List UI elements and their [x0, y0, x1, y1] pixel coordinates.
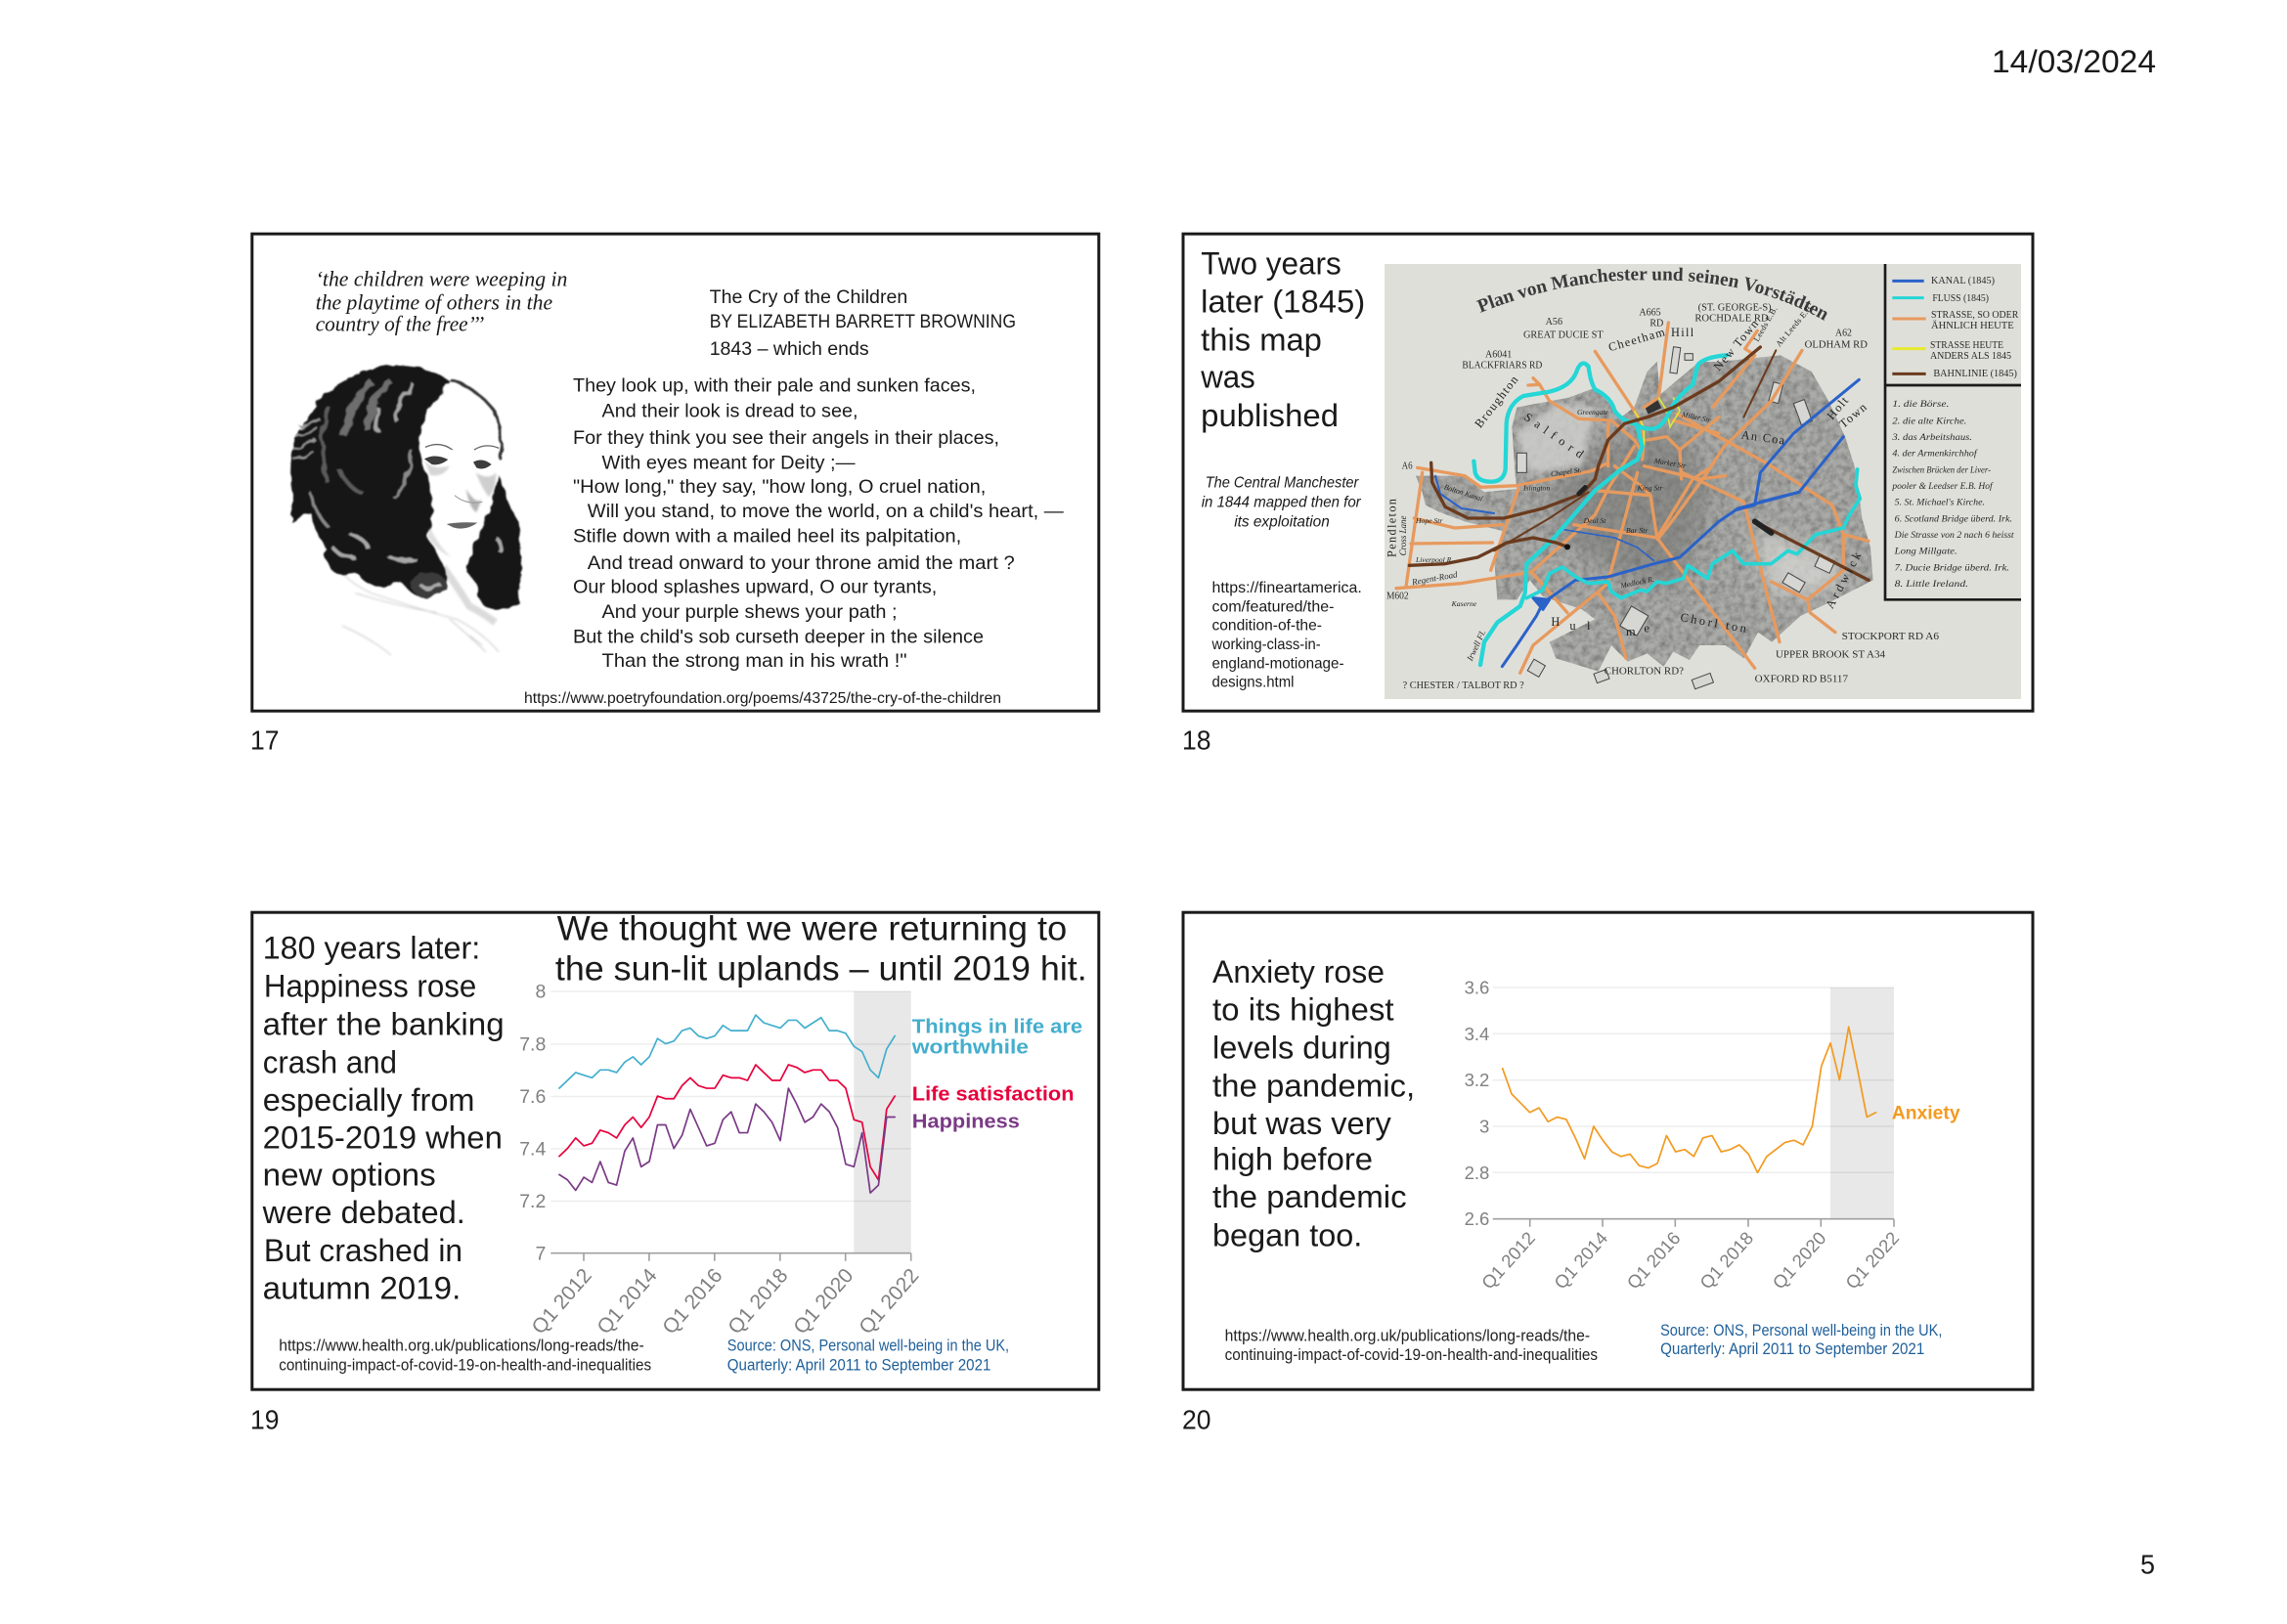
left text block: began too. — [1212, 1217, 1362, 1252]
chart source — [727, 1338, 1009, 1375]
source url: https://www.health.org.uk/publications/long-reads/the- — [1225, 1328, 1590, 1345]
left text block: Anxiety rose — [1212, 954, 1385, 989]
district labels: H — [1551, 615, 1561, 629]
heading — [1200, 246, 1365, 433]
road labels: M602 — [1386, 592, 1409, 602]
map key list: 3. das Arbeitshaus. — [1891, 432, 1972, 442]
poem text: Will you stand, to move the world, on a child's heart, — — [588, 501, 1064, 522]
y axis labels: 7.6 — [519, 1086, 546, 1108]
district labels: l — [1587, 619, 1592, 633]
district labels: m — [1626, 625, 1637, 638]
road labels: OLDHAM RD — [1805, 339, 1868, 350]
italic caption — [1202, 474, 1361, 530]
chart source: Quarterly: April 2011 to September 2021 — [1660, 1340, 1924, 1358]
x axis labels: Q1 2020 — [789, 1264, 858, 1339]
poem title: The Cry of the Children — [710, 286, 907, 308]
railways — [1409, 347, 1869, 580]
left text block: to its highest — [1212, 991, 1394, 1027]
map key list: 1. die Börse. — [1892, 399, 1949, 409]
district labels: Bolton Kanal — [1443, 482, 1484, 504]
source url: continuing-impact-of-covid-19-on-health-and-inequalities — [1225, 1346, 1598, 1364]
slide number 18: 18 — [1182, 725, 1210, 756]
page number: 5 — [2140, 1549, 2155, 1579]
map legend: BAHNLINIE (1845) — [1933, 369, 2017, 379]
district labels: Chapel St. — [1550, 465, 1582, 478]
district labels — [1385, 302, 1870, 663]
map key list: 6. Scotland Bridge überd. Irk. — [1895, 513, 2012, 523]
y axis labels: 7.8 — [519, 1034, 546, 1056]
district labels: Medlock R. — [1619, 575, 1655, 591]
poem title: 1843 – which ends — [710, 338, 869, 360]
road labels: UPPER BROOK ST A34 — [1776, 650, 1886, 661]
x axis labels — [528, 1264, 923, 1339]
district labels: Ardwick — [1823, 547, 1866, 611]
map key list: 7. Ducie Bridge überd. Irk. — [1895, 562, 2009, 572]
map source url: england-motionage- — [1212, 655, 1343, 672]
road labels: OXFORD RD B5117 — [1755, 674, 1849, 684]
italic caption: in 1844 mapped then for — [1202, 494, 1361, 510]
district labels: S a l f o r d — [1521, 410, 1587, 461]
panel: slide 20 anxiety — [1183, 912, 2033, 1389]
heading: this map — [1201, 322, 1322, 357]
poem text: And tread onward to your throne amid the mart ? — [588, 552, 1015, 574]
y axis labels: 2.6 — [1465, 1208, 1489, 1229]
chart source: Source: ONS, Personal well-being in the UK, — [727, 1338, 1009, 1355]
legend — [911, 1017, 1082, 1132]
district labels: Pendleton — [1385, 498, 1398, 557]
quote: country of the free’’’ — [316, 312, 484, 336]
district labels: Alt Leeds E.B. — [1775, 302, 1815, 348]
source url — [279, 1338, 651, 1375]
heading: Two years — [1201, 246, 1341, 282]
district labels: Chorl ton — [1679, 610, 1750, 636]
source url: continuing-impact-of-covid-19-on-health-and-inequalities — [279, 1357, 651, 1375]
district labels: Leeds E.B. — [1752, 305, 1780, 343]
left text block: 2015-2019 when — [263, 1119, 503, 1155]
x axis labels — [1477, 1228, 1903, 1293]
poem text: Than the strong man in his wrath !" — [602, 650, 907, 672]
road labels: A665 — [1639, 308, 1661, 319]
x axis labels: Q1 2018 — [1695, 1228, 1757, 1293]
left text block: crash and — [263, 1044, 397, 1079]
slide number 20: 20 — [1182, 1405, 1210, 1435]
district labels: Cross Lane — [1398, 515, 1408, 555]
x axis labels: Q1 2012 — [1477, 1228, 1539, 1293]
face features — [424, 445, 499, 529]
poem text: Our blood splashes upward, O our tyrants, — [573, 577, 937, 598]
x axis labels: Q1 2020 — [1768, 1228, 1830, 1293]
district labels: King Str — [1637, 484, 1662, 493]
y axis labels: 8 — [535, 982, 546, 1003]
left text block: the pandemic, — [1212, 1069, 1415, 1104]
left text block: But crashed in — [264, 1233, 462, 1268]
left text block: were debated. — [262, 1195, 465, 1230]
x axis labels: Q1 2016 — [1622, 1228, 1685, 1293]
x axis labels: Q1 2012 — [528, 1264, 596, 1339]
poem text — [573, 375, 1064, 672]
district labels: Holt — [1825, 393, 1852, 422]
map source url: designs.html — [1212, 675, 1295, 691]
left text block: autumn 2019. — [263, 1270, 461, 1305]
y axis labels: 3 — [1479, 1117, 1489, 1136]
y axis labels — [519, 982, 546, 1264]
poem text: "How long," they say, "how long, O cruel nation, — [573, 476, 986, 498]
map source url — [1211, 580, 1362, 691]
legend: Things in life are — [912, 1017, 1082, 1038]
left text block — [262, 931, 505, 1305]
chart source: Source: ONS, Personal well-being in the UK, — [1660, 1322, 1942, 1339]
map legend: FLUSS (1845) — [1932, 293, 1989, 304]
map source url: https://fineartamerica. — [1212, 580, 1362, 596]
x axis labels: Q1 2022 — [855, 1264, 923, 1339]
map legend — [1885, 264, 2021, 599]
road labels: ? CHESTER / TALBOT RD ? — [1403, 680, 1524, 691]
series label: Anxiety — [1892, 1103, 1960, 1123]
series: life satisfaction — [559, 1065, 895, 1180]
map key list: 2. die alte Kirche. — [1892, 416, 1966, 425]
left text block: especially from — [263, 1082, 475, 1118]
slide frame — [1183, 234, 2033, 711]
road labels: ROCHDALE RD — [1694, 313, 1769, 324]
road labels: A6 — [1402, 461, 1413, 471]
poem title — [710, 286, 1016, 360]
map legend: STRASSE HEUTE — [1930, 340, 2003, 351]
road labels: A6041 — [1485, 350, 1512, 361]
source url: https://www.health.org.uk/publications/long-reads/the- — [279, 1338, 644, 1355]
district labels: Islington — [1522, 484, 1550, 493]
city mass — [1416, 347, 1873, 689]
y axis labels: 7.2 — [519, 1191, 546, 1212]
district labels: Market Str — [1652, 456, 1687, 470]
yellow roads — [1634, 398, 1680, 447]
chart source — [1660, 1322, 1942, 1358]
slide frame — [252, 912, 1099, 1389]
district labels: Bar Str — [1626, 526, 1648, 535]
y axis labels: 2.8 — [1465, 1163, 1489, 1183]
road labels: RD — [1649, 318, 1664, 329]
canals — [1435, 379, 1859, 667]
left text block — [1212, 954, 1415, 1252]
map paper — [1385, 264, 2021, 699]
road labels: A62 — [1835, 328, 1852, 338]
map key list: Die Strasse von 2 nach 6 heisst — [1894, 530, 2014, 540]
quote: ‘the children were weeping in — [316, 267, 567, 291]
y axis labels — [1465, 978, 1489, 1229]
dress sketch lines — [323, 535, 499, 655]
road labels: A56 — [1546, 317, 1563, 328]
district labels: Liverpool R. — [1415, 555, 1453, 564]
map source url: condition-of-the- — [1212, 618, 1322, 635]
x axis labels: Q1 2014 — [1550, 1228, 1611, 1293]
poem title: BY ELIZABETH BARRETT BROWNING — [710, 311, 1016, 332]
map legend: KANAL (1845) — [1931, 276, 1995, 286]
y axis labels: 7 — [535, 1243, 546, 1264]
poem text: With eyes meant for Deity ;— — [602, 452, 856, 473]
legend: Life satisfaction — [912, 1084, 1074, 1106]
chart source: Quarterly: April 2011 to September 2021 — [727, 1357, 990, 1375]
line chart: wellbeing — [519, 982, 1082, 1339]
x axis labels: Q1 2022 — [1841, 1228, 1903, 1293]
heading: was — [1200, 360, 1255, 395]
poem text: For they think you see their angels in their places, — [573, 427, 999, 449]
legend: Happiness — [912, 1111, 1020, 1132]
quote — [316, 267, 567, 336]
district labels: Irwell Fl. — [1465, 629, 1487, 663]
hair highlights — [344, 381, 391, 437]
road labels: STOCKPORT RD A6 — [1842, 632, 1940, 642]
x axis labels: Q1 2018 — [724, 1264, 793, 1339]
roads — [1396, 323, 1869, 673]
district labels: e — [1644, 622, 1650, 636]
building blocks — [1517, 347, 1835, 689]
slide frame — [252, 234, 1099, 711]
map key list: Zwischen Brücken der Liver- — [1892, 464, 1991, 474]
map legend: STRASSE, SO ODER — [1931, 310, 2019, 321]
slide heading: the sun-lit uplands – until 2019 hit. — [555, 950, 1087, 988]
heading: published — [1201, 398, 1339, 433]
map source url: com/featured/the- — [1212, 598, 1334, 615]
x axis labels: Q1 2016 — [658, 1264, 727, 1339]
road labels: CHORLTON RD? — [1605, 666, 1684, 677]
panel: slide 19 happiness — [252, 910, 1099, 1389]
italic caption: its exploitation — [1234, 513, 1330, 530]
map source url: working-class-in- — [1211, 636, 1321, 653]
district labels: Miller Str — [1680, 410, 1711, 424]
poem text: They look up, with their pale and sunken faces, — [573, 375, 976, 397]
map key list: Long Millgate. — [1893, 547, 1957, 556]
left text block: the pandemic — [1212, 1179, 1407, 1214]
y axis labels: 3.6 — [1465, 978, 1489, 997]
district labels: Cheetham — [1606, 325, 1667, 354]
district labels: Regent-Road — [1410, 569, 1459, 587]
left text block: 180 years later: — [263, 931, 480, 966]
map key list: 4. der Armenkirchhof — [1892, 449, 1978, 459]
district labels: Greengate — [1577, 408, 1609, 417]
district labels: Hill — [1671, 326, 1695, 339]
left text block: levels during — [1212, 1031, 1391, 1066]
portrait of Elizabeth Barrett Browning — [291, 365, 521, 655]
italic caption: The Central Manchester — [1206, 474, 1359, 491]
rivers — [1473, 355, 1860, 665]
line chart: anxiety — [1465, 978, 1960, 1293]
road labels: (ST. GEORGE-S) — [1698, 302, 1772, 313]
quote: the playtime of others in the — [316, 290, 552, 315]
y axis labels: 3.2 — [1465, 1070, 1489, 1090]
left text block: high before — [1212, 1142, 1373, 1177]
source url — [1225, 1328, 1598, 1364]
left text block: after the banking — [263, 1006, 505, 1041]
y axis labels: 7.4 — [519, 1139, 546, 1161]
left text block: Happiness rose — [264, 968, 476, 1003]
district labels: Broughton — [1472, 373, 1521, 430]
slide heading — [555, 910, 1087, 988]
map key list: 8. Little Ireland. — [1895, 579, 1968, 589]
series: anxiety — [1503, 1027, 1876, 1172]
left text block: but was very — [1212, 1106, 1392, 1141]
road labels: GREAT DUCIE ST — [1523, 329, 1604, 340]
map key list — [1891, 399, 2014, 589]
heading: later (1845) — [1201, 284, 1365, 319]
hair mass — [291, 365, 521, 610]
y axis labels: 3.4 — [1465, 1024, 1489, 1044]
road labels — [1386, 302, 1940, 691]
slide number 17: 17 — [250, 725, 280, 756]
slide number 19: 19 — [250, 1405, 280, 1435]
panel: slide 18 map — [1181, 233, 2034, 713]
district labels: New Town — [1711, 316, 1762, 373]
map of Manchester 1845 — [1385, 264, 2021, 699]
series: things in life are worthwhile — [559, 1015, 895, 1088]
road labels: BLACKFRIARS RD — [1462, 361, 1543, 372]
poem text: But the child's sob curseth deeper in the silence — [573, 626, 984, 647]
slide heading: We thought we were returning to — [557, 910, 1067, 948]
district labels: u — [1569, 619, 1577, 633]
district labels: Deal St — [1583, 516, 1606, 525]
poem source url: https://www.poetryfoundation.org/poems/43725/the-cry-of-the-children — [524, 690, 1001, 707]
poem text: And your purple shews your path ; — [602, 601, 898, 623]
poem text: And their look is dread to see, — [602, 401, 858, 422]
map key list: 5. St. Michael's Kirche. — [1895, 498, 1985, 507]
poem text: Stifle down with a mailed heel its palpitation, — [573, 525, 961, 547]
district labels: Town — [1836, 400, 1870, 431]
map legend: ANDERS ALS 1845 — [1930, 351, 2011, 362]
x axis labels: Q1 2014 — [593, 1264, 662, 1339]
face shading — [423, 458, 496, 557]
left text block: new options — [263, 1158, 436, 1193]
date: 14/03/2024 — [1992, 44, 2156, 79]
legend: worthwhile — [911, 1037, 1029, 1059]
district labels: Kaserne — [1451, 599, 1477, 608]
map key list: pooler & Leedser E.B. Hof — [1891, 481, 1994, 491]
district labels: Hope Str — [1415, 516, 1442, 525]
map title: Plan von Manchester und seinen Vorstädten. — [1476, 268, 1826, 321]
map legend: ÄHNLICH HEUTE — [1931, 320, 2014, 331]
slide frame — [1183, 912, 2033, 1389]
panel: slide 17 poem — [252, 234, 1099, 711]
district labels: An Coa — [1740, 427, 1786, 448]
series: happiness — [559, 1088, 895, 1193]
